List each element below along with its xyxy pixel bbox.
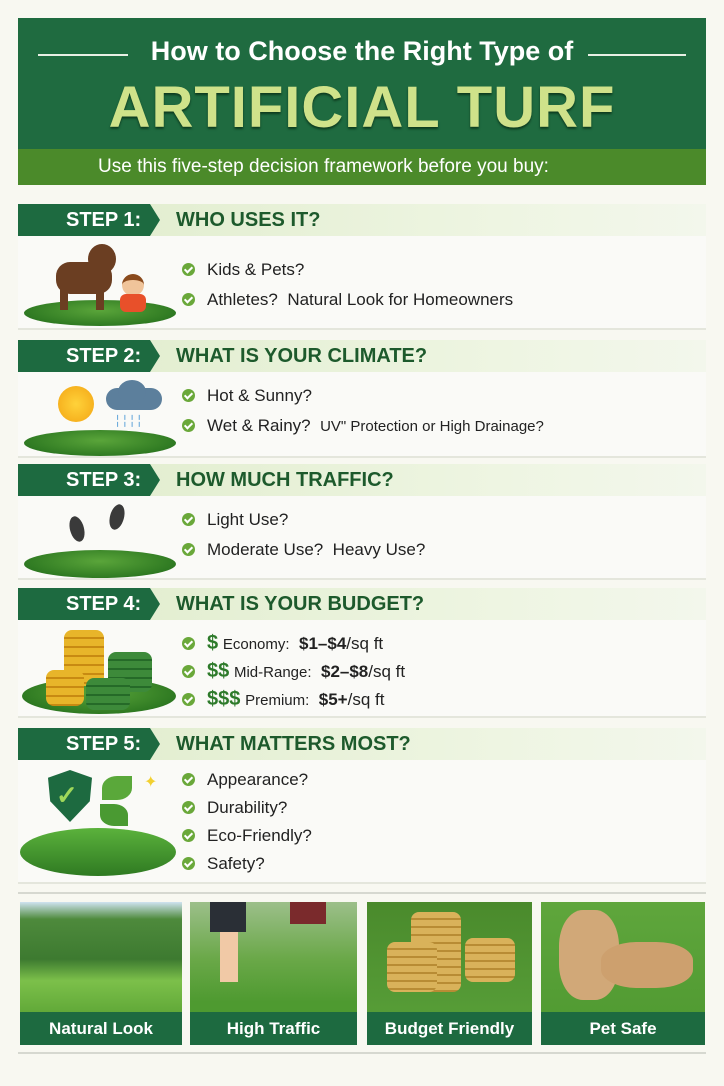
step 5 body: Safety? [207, 854, 265, 873]
step 4 header: WHAT IS YOUR BUDGET? [176, 593, 424, 615]
icon: sun and rain cloud [24, 380, 176, 456]
photo: budget friendly [367, 902, 532, 1045]
step 3 header: HOW MUCH TRAFFIC? [176, 469, 394, 491]
icon: dog and kid on grass [24, 244, 176, 326]
subtitle band: Use this five-step decision framework before you buy: [98, 156, 549, 177]
step 1 header: WHO USES IT? [176, 209, 320, 231]
icon: sun and rain cloud: ╎╎╎╎ [114, 414, 143, 428]
list: Appearance? [207, 770, 308, 789]
step 5 body [18, 760, 706, 884]
step 1 body: Athletes? Natural Look for Homeowners [207, 290, 513, 309]
header panel [18, 18, 706, 185]
step 5 header [18, 728, 706, 760]
photo: high traffic [190, 902, 357, 1045]
step 2 header: WHAT IS YOUR CLIMATE? [176, 345, 427, 367]
step 1 header [18, 204, 706, 236]
step 5 header: WHAT MATTERS MOST? [176, 733, 411, 755]
icon: shield, leaves and grass [20, 770, 176, 876]
step 1 body [18, 236, 706, 330]
photo: natural look: Natural Look [49, 1019, 153, 1038]
step 2 header [18, 340, 706, 372]
step 3 header: STEP 3: [66, 469, 141, 491]
divider [18, 1052, 706, 1054]
step 2 body [18, 372, 706, 458]
step 5 header: STEP 5: [66, 733, 141, 755]
step 4 body [18, 620, 706, 718]
main title: ARTIFICIAL TURF [109, 75, 615, 140]
step 3 body [18, 496, 706, 580]
subtitle band [18, 149, 706, 185]
step 4 body: $$ Mid-Range: $2–$8/sq ft [207, 660, 405, 682]
icon: footprints [24, 504, 176, 578]
step 4 header [18, 588, 706, 620]
photo: pet safe [541, 902, 705, 1045]
step 5 body: Eco-Friendly? [207, 826, 312, 845]
photo: high traffic: High Traffic [227, 1019, 320, 1038]
step 5 body: Durability? [207, 798, 287, 817]
step 2 header: STEP 2: [66, 345, 141, 367]
icon: shield, leaves and grass: ✓ [56, 780, 78, 810]
step 1 header: STEP 1: [66, 209, 141, 231]
step 4 body: $$$ Premium: $5+/sq ft [207, 688, 384, 710]
list: Hot & Sunny? [207, 386, 312, 405]
step 4 header: STEP 4: [66, 593, 141, 615]
divider [18, 892, 706, 894]
list: Light Use? [207, 510, 288, 529]
icon: shield, leaves and grass: ✦ [144, 774, 157, 791]
list: $ Economy: $1–$4/sq ft [207, 632, 383, 654]
list: Kids & Pets? [207, 260, 304, 279]
icon: coin stacks [22, 630, 176, 714]
step 2 body: Wet & Rainy? UV" Protection or High Drainage? [207, 416, 544, 435]
photo: budget friendly: Budget Friendly [385, 1019, 514, 1038]
title line: How to Choose the Right Type of [151, 36, 573, 66]
step 3 header [18, 464, 706, 496]
photo: natural look [20, 902, 182, 1045]
photo: pet safe: Pet Safe [589, 1019, 657, 1038]
step 3 body: Moderate Use? Heavy Use? [207, 540, 425, 559]
